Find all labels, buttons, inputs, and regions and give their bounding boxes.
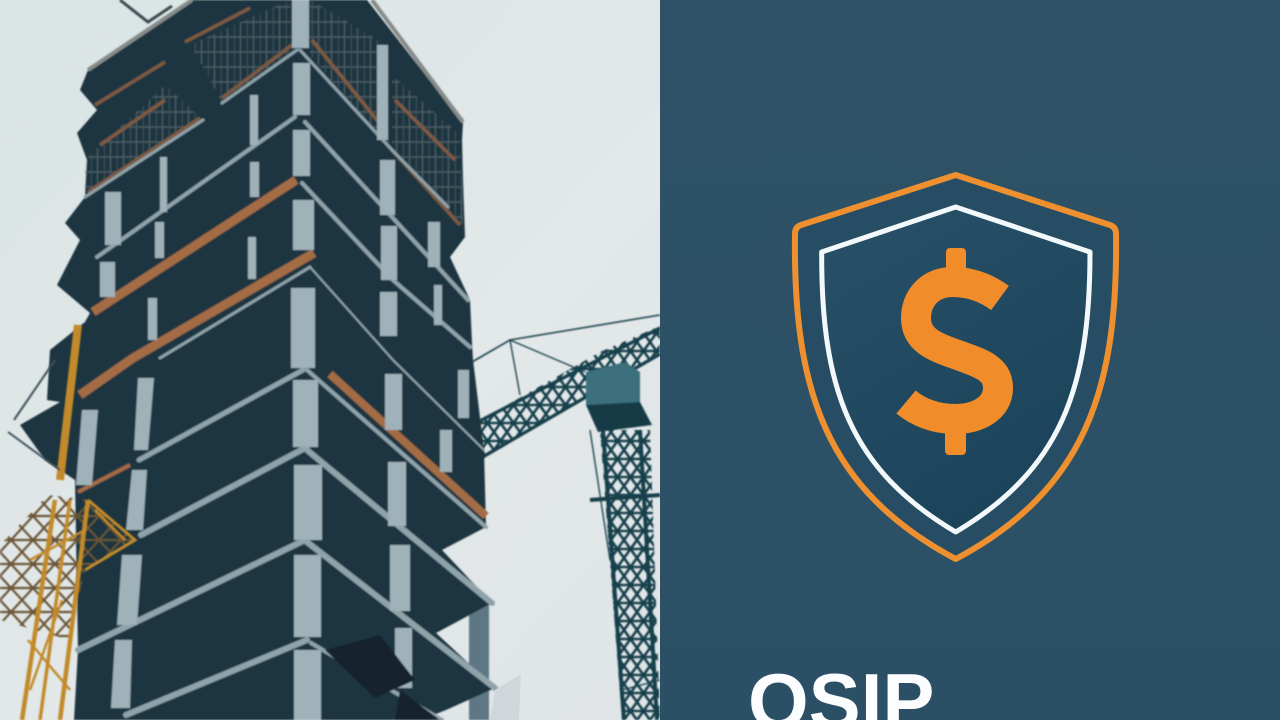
icon: shield with dollar sign	[795, 175, 1116, 559]
building silhouette	[20, 0, 495, 720]
tower crane	[472, 315, 660, 720]
floor slab edges	[78, 50, 495, 720]
rusty orange slab edges	[78, 180, 486, 516]
concrete columns	[76, 0, 469, 720]
rear column	[469, 600, 489, 720]
shield outer outline	[795, 175, 1116, 559]
scaffolding top floors	[85, 0, 463, 225]
sky background	[0, 0, 660, 720]
panel: construction photo	[0, 0, 660, 720]
dollar sign	[906, 248, 1000, 455]
panel background	[660, 0, 1280, 720]
orange scaffolding crane	[0, 325, 135, 720]
shield inner outline	[822, 207, 1090, 532]
building	[20, 0, 495, 720]
lower bracket	[325, 635, 415, 698]
faint plastic sheet	[490, 674, 521, 720]
panel: brand panel	[748, 172, 1120, 720]
